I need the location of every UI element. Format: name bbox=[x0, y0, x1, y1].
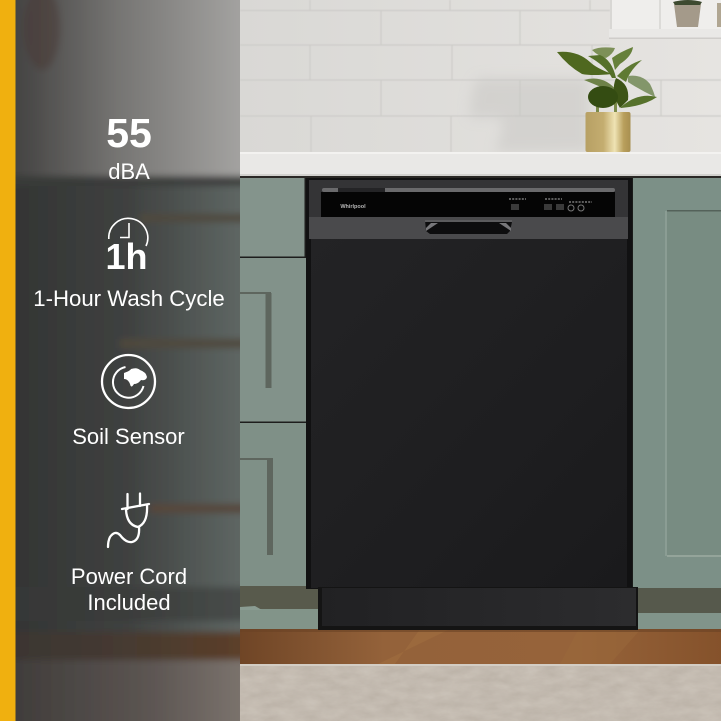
label: dBA: dBA bbox=[108, 159, 150, 184]
door handle bbox=[425, 220, 512, 234]
plant shadow on wall bbox=[470, 78, 590, 152]
yellow accent bar bbox=[0, 0, 16, 721]
feature: power cord: Included bbox=[87, 590, 171, 615]
potted plant on counter bbox=[557, 47, 657, 152]
feature: 55 dBA bbox=[106, 110, 152, 184]
icon: clock with 1h bbox=[105, 218, 148, 277]
value: 55: 55 bbox=[106, 110, 152, 156]
wood floor bbox=[240, 629, 721, 666]
cabinet door frame lines bbox=[240, 292, 273, 555]
rug bbox=[240, 664, 721, 721]
feature: 1-hour wash cycle bbox=[33, 218, 225, 311]
white countertop bbox=[240, 152, 721, 179]
background: kitchen scene bbox=[240, 0, 721, 721]
toe kick bbox=[318, 587, 638, 630]
left cabinets bbox=[240, 178, 321, 630]
blurred translucent side panel bbox=[16, 0, 240, 721]
feature: soil sensor bbox=[72, 355, 185, 449]
label: 1-Hour Wash Cycle: 1-Hour Wash Cycle bbox=[33, 286, 225, 311]
dishwasher bbox=[306, 178, 632, 589]
label: Soil Sensor: Soil Sensor bbox=[72, 424, 185, 449]
label: Power Cord Included: Power Cord bbox=[71, 564, 187, 589]
feature: power cord bbox=[71, 494, 187, 615]
icon: soil sensor circle bbox=[102, 355, 155, 408]
white shelf with small potted plant bbox=[609, 0, 721, 39]
tile backsplash bbox=[240, 0, 721, 153]
right cabinet bbox=[630, 178, 721, 633]
icon: plug and cord bbox=[108, 494, 149, 547]
icon: clock with 1h: 1h bbox=[105, 236, 148, 277]
control panel: Whirlpool bbox=[340, 204, 366, 210]
control panel bbox=[321, 188, 615, 217]
